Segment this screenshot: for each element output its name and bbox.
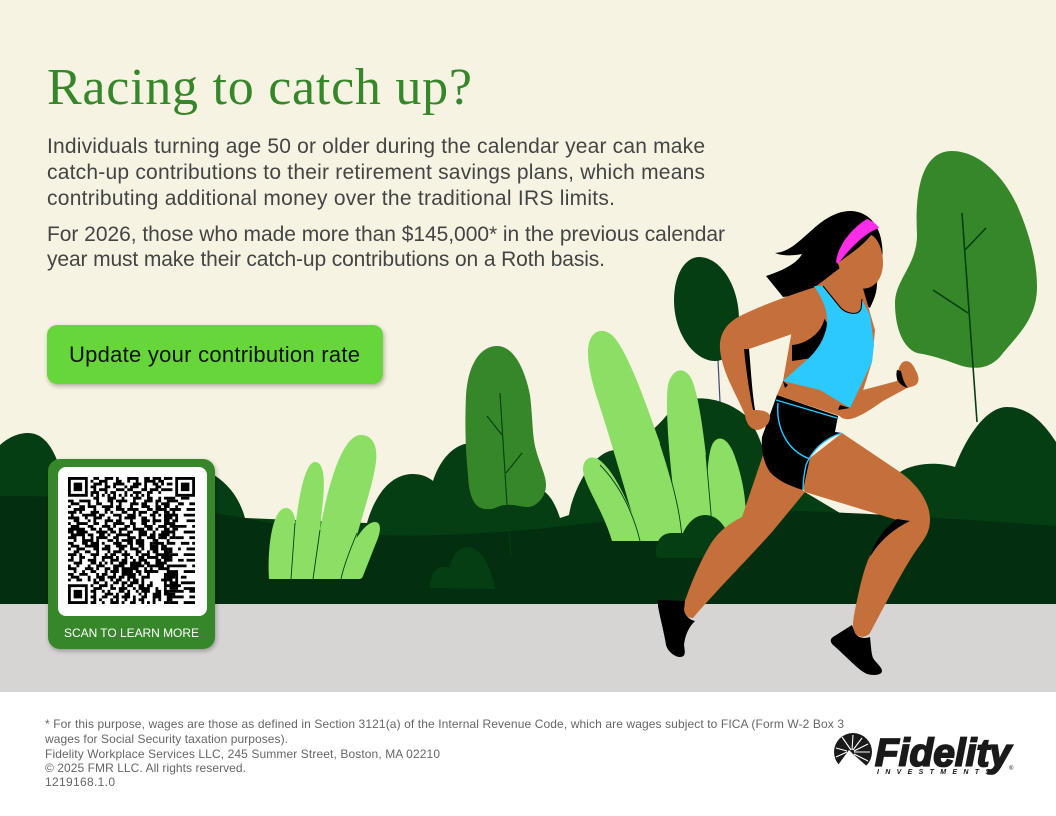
Fidelity logo: INVESTMENTS <box>877 769 990 776</box>
shoe back <box>658 600 695 657</box>
QR code <box>68 477 195 604</box>
footnote: 1219168.1.0 <box>45 775 115 789</box>
torso <box>777 268 875 416</box>
tree: dark oval leaf <box>674 257 739 402</box>
footnote: Fidelity Workplace Services LLC, 245 Summer Street, Boston, MA 02210 <box>45 747 440 761</box>
small bush front <box>656 515 726 558</box>
QR card <box>48 459 215 649</box>
runner <box>658 211 930 675</box>
hair <box>766 211 883 308</box>
headband <box>836 219 879 264</box>
QR caption: SCAN TO LEARN MORE <box>64 626 199 640</box>
face <box>838 235 883 289</box>
footnote: wages for Social Security taxation purposes). <box>44 732 288 746</box>
body text <box>47 59 725 271</box>
footnote: © 2025 FMR LLC. All rights reserved. <box>45 761 246 775</box>
Fidelity logo: ® <box>1009 765 1014 772</box>
body text: For 2026, those who made more than $145,000* in the previous calendar <box>47 223 725 246</box>
small bush <box>430 547 495 589</box>
front leg <box>803 433 930 637</box>
road <box>0 604 1056 692</box>
body text: catch-up contributions to their retirement savings plans, which means <box>47 161 705 184</box>
tank top <box>783 286 874 408</box>
footnote: * For this purpose, wages are those as defined in Section 3121(a) of the Internal Revenue Code, which are wages subject to FICA (Form W-2 Box 3 <box>45 717 844 731</box>
shoe front <box>831 625 882 675</box>
bra <box>792 318 830 361</box>
grass: large cluster <box>583 331 746 541</box>
foreground ground <box>0 496 1056 610</box>
tree: large green leaf <box>895 151 1037 422</box>
body text: year must make their catch-up contributions on a Roth basis. <box>47 248 605 271</box>
button: Update your contribution rate <box>69 342 360 367</box>
rear arm <box>838 355 918 419</box>
shorts <box>762 395 842 490</box>
background hills <box>0 398 1056 560</box>
front arm <box>720 287 825 430</box>
body text: Individuals turning age 50 or older during the calendar year can make <box>47 135 705 158</box>
back leg <box>683 455 805 618</box>
title: Racing to catch up? <box>47 59 472 116</box>
body text: contributing additional money over the traditional IRS limits. <box>47 187 615 210</box>
knee shadow <box>870 519 910 557</box>
button <box>47 325 383 384</box>
Fidelity logo: Fidelity <box>875 732 1013 775</box>
grass: left cluster <box>269 435 380 579</box>
footnote <box>44 717 844 789</box>
tree: middle leaf <box>465 346 546 556</box>
